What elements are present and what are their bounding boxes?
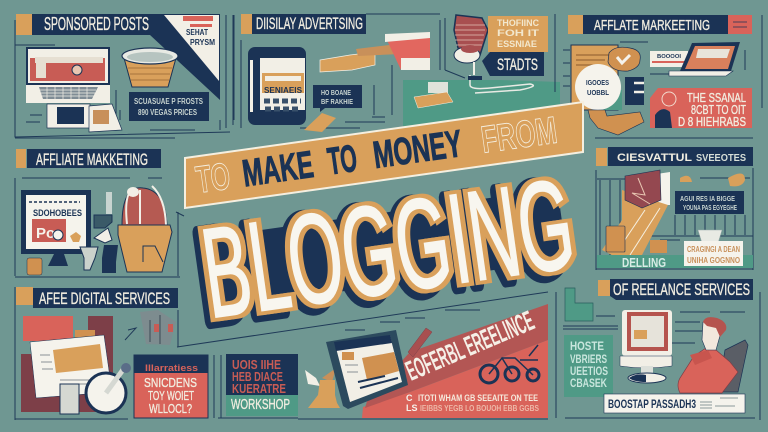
heading: sponsored posts: SPONSORED POSTS [44,14,149,34]
icon: teal tab [565,288,593,321]
text block: small navy label [313,85,362,112]
icon: striped cup [122,48,178,87]
callout: workshop: HEB DIACE [232,369,283,384]
callout: red card: WLLOCL? [149,401,192,416]
callout: stats tag [482,16,548,76]
panel: freelance banner [298,304,548,419]
icon: folder and document [602,170,670,255]
icon: parcels [588,110,644,135]
panel: freelance services [556,279,760,420]
panel: display advertising [234,14,560,132]
callout: stats tag: FOH IT [497,28,540,38]
panel: affiliate marketing right [555,14,762,138]
heading: to make to money from [193,110,560,202]
text block: sponsored caption: 890 VEGAS PRICES [138,108,198,117]
heading: display advertising [241,14,366,34]
callout: workshop: KUERATRE [232,381,286,396]
icon: monitor: SDOHOBEES [33,208,82,218]
text block: sponsored caption [129,92,209,121]
heading: services: SVEEOTES [696,153,746,164]
callout: stats tag: ESSNIAE [497,39,537,49]
callout: corner triangle [150,14,220,100]
icon: monitor [620,310,672,383]
heading: affiliate marketing: AFFLATE MARKEETING [594,17,710,34]
title: blogging [187,152,586,350]
icon: laptop and card [650,42,740,76]
banner: red ribbon [362,304,548,418]
text block: teal card: CBASEK [570,376,607,390]
callout: red banner: D 8 HIEHRABS [678,114,746,129]
heading: services [596,147,753,166]
icon: laptop [26,47,122,132]
icon: document with badge: UOBBL [587,90,610,97]
label: teal strip: DELLING [622,255,666,270]
callout: workshop: UOIS IIHE [232,357,281,372]
icon: parcels [320,32,430,72]
icon: microphone [454,15,488,80]
text block: white card [684,241,743,266]
text block: navy note: YOUNA PAS EGYEGHE [683,205,737,212]
icon: small gadgets [80,192,118,273]
icon: monitor: Po [36,225,55,242]
panel: title banner [185,102,583,208]
label: teal strip [597,255,753,270]
panel: teal desk [403,75,560,130]
callout: red banner: THE SSANAL [687,90,746,105]
icon: laptop and card: BOOOOI [657,54,682,60]
panel: sponsored posts [15,14,233,137]
heading: to make to money from: MAKE [240,144,316,195]
callout: stats tag: THOFIINC [497,18,539,28]
heading: to make to money from: MONEY [371,123,465,177]
icon: pen tip [304,113,336,132]
callout: red card: Illarratiess [145,363,198,373]
text block: sponsored caption: SCUASUAE P FROSTS [134,97,204,106]
heading: digital services [16,287,178,308]
text block: small navy label: HO BOANE [321,90,351,97]
icon: tablet [326,330,408,409]
icon: basket with bag [118,186,172,272]
icon: tablet calculator [248,47,306,125]
heading: affiliate marketing [16,149,161,169]
heading: digital services: AFEE DIGITAL SERVICES [39,289,170,308]
callout: workshop: WORKSHOP [231,396,290,413]
text block: banner fine print: C [406,393,413,403]
text block: teal card: HOSTE [570,339,604,353]
text block: banner fine print: ITOTI WHAM GB SEEAITE ON TEE [418,393,538,403]
text block: banner fine print [406,393,540,413]
text block: teal card [564,335,613,397]
icon: document with badge [571,45,644,110]
callout: corner triangle: SEHAT [186,28,208,37]
callout: red card: SNICDENS [144,375,197,390]
label: white bar: BOOSTAP PASSADH3 [608,397,696,411]
text block: banner fine print: LS [406,403,418,413]
heading: to make to money from: TO [325,138,360,183]
icon: pencil [408,328,432,357]
heading: to make to money from: TO [193,156,233,202]
panel: affiliate marketing left [15,138,184,277]
heading: display advertising: DIISILAY ADVERTSING [256,14,363,33]
icon: books [140,310,176,345]
icon: seated person [678,317,748,393]
text block: white card: CRAGINGI A DEAN [687,245,740,254]
callout: red card [134,355,208,418]
callout: workshop [226,354,298,416]
text block: navy note: AGUI RES IA BIGGE [680,196,735,203]
callout: corner triangle: PRYSM [190,38,215,47]
text block: banner fine print: IEIBBS YEGB LO BOUOH EBB GGBS [420,404,540,413]
text block: teal card: VBRIERS [570,352,607,366]
text block: navy note [675,191,744,214]
panel: digital services [15,287,548,420]
text block: white card: UNIHA GOGNNO [687,256,740,265]
icon: monitor [21,190,91,275]
text block: small navy label: BF RAKHIE [321,99,353,106]
heading: affiliate marketing: AFFLIATE MAKKETING [36,150,148,169]
text block: teal card: UEETIOS [570,364,608,378]
icon: bicycle [480,345,539,383]
icon: box and cups [606,173,745,253]
panel: selling services [596,147,753,270]
icon: documents and gauge [21,316,131,414]
heading: services: CIESVATTUL [617,152,692,164]
callout: red banner [650,88,752,129]
icon: tablet calculator: SENIAEIS [264,86,303,95]
heading: to make to money from: FROM [479,110,560,162]
banner: red ribbon: EOFERBL EREELINCE [401,305,539,387]
callout: stats tag: STADTS [497,55,538,74]
label: white bar [604,394,745,413]
icon: mortar cup [305,368,340,408]
callout: red card: TOY WOIET [148,388,194,403]
icon: document with badge: IGOOES [586,80,609,87]
